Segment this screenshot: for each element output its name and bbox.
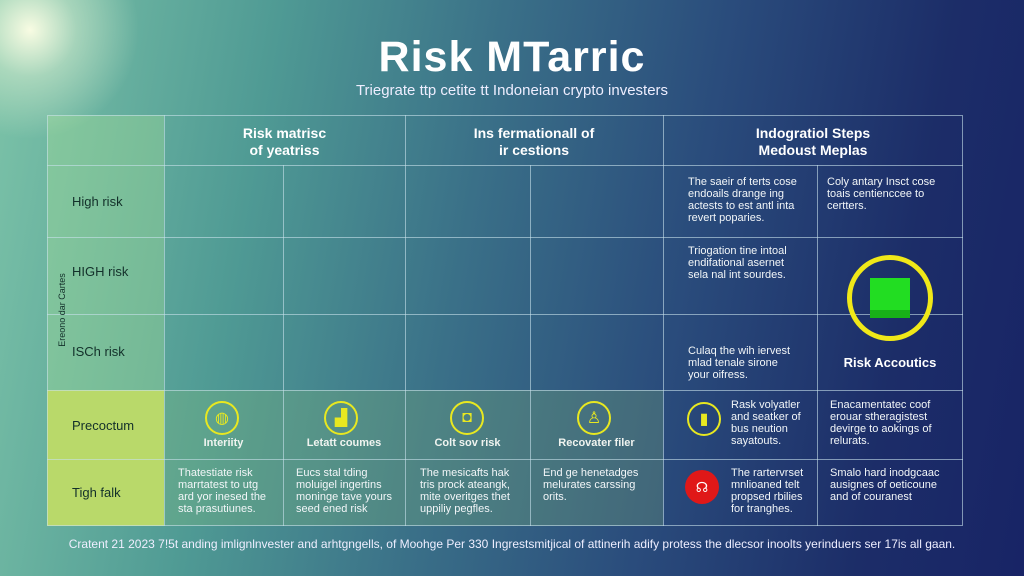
text: Interiity bbox=[204, 437, 243, 449]
row labels: High risk bbox=[72, 194, 123, 209]
icon: globe: ◍ bbox=[215, 410, 229, 427]
column headers: Risk matrisc bbox=[243, 125, 326, 141]
text: Triogation tine intoal bbox=[688, 245, 787, 257]
icon: person bbox=[577, 401, 611, 435]
text: erouar stheragistest bbox=[830, 411, 927, 423]
text: and seatker of bbox=[731, 411, 801, 423]
text: devirge to aokings of bbox=[830, 423, 932, 435]
text: certters. bbox=[827, 200, 867, 212]
icon: chart bbox=[324, 401, 358, 435]
icon: coins bbox=[687, 402, 721, 436]
icon: red alert bbox=[685, 470, 719, 504]
text: Medoust Meplas bbox=[759, 142, 867, 158]
bottom row texts bbox=[178, 467, 266, 515]
text: Indogratiol Steps bbox=[756, 125, 870, 141]
text: End ge henetadges bbox=[543, 467, 638, 479]
text: and of couranest bbox=[830, 491, 912, 503]
text: bus neution bbox=[731, 423, 788, 435]
icon: person: ♙ bbox=[587, 410, 601, 427]
text: Letatt coumes bbox=[307, 437, 381, 449]
text: for tranghes. bbox=[731, 503, 793, 515]
text: toais centienccee to bbox=[827, 188, 924, 200]
text: sayatouts. bbox=[731, 435, 781, 447]
text: The rartervrset bbox=[731, 467, 803, 479]
text: ir cestions bbox=[499, 142, 569, 158]
text: Ins fermationall of bbox=[474, 125, 594, 141]
text: Colt sov risk bbox=[434, 437, 501, 449]
text: endifational asernet bbox=[688, 257, 784, 269]
column headers: of yeatriss bbox=[249, 142, 320, 158]
text: Eucs stal tding bbox=[296, 467, 368, 479]
text: Tigh falk bbox=[72, 485, 121, 500]
right panel texts: revert poparies. bbox=[688, 212, 764, 224]
text: Coly antary Insct cose bbox=[827, 176, 935, 188]
right panel texts: actests to est antl inta bbox=[688, 200, 794, 212]
text: Risk Accoutics bbox=[844, 355, 936, 370]
bottom row texts: sta prasutiunes. bbox=[178, 503, 256, 515]
text: moninge tave yours bbox=[296, 491, 392, 503]
footer: Cratent 21 2023 7!5t anding imlignlnvester and arhtgngells, of Moohge Per 330 Ingrestsmitjical of attinerih adify protess the dlecsor inoolts yerinduers ser 17is all gaan. bbox=[69, 537, 955, 551]
bottom row texts: ard yor inesed the bbox=[178, 491, 266, 503]
text: ausignes of oeticoune bbox=[830, 479, 937, 491]
matrix table bbox=[47, 115, 963, 526]
icon: coins: ▮ bbox=[700, 411, 708, 428]
text: orits. bbox=[543, 491, 567, 503]
text: mnlioaned telt bbox=[731, 479, 800, 491]
text: Enacamentatec coof bbox=[830, 399, 930, 411]
text: seed ened risk bbox=[296, 503, 368, 515]
text: uppiliy pegfles. bbox=[420, 503, 493, 515]
column headers bbox=[243, 125, 326, 158]
right panel texts bbox=[688, 176, 797, 224]
title: Risk MTarric bbox=[379, 33, 645, 81]
text: relurats. bbox=[830, 435, 870, 447]
icon: red alert: ☊ bbox=[696, 479, 708, 495]
text: sela nal int sourdes. bbox=[688, 269, 786, 281]
text: your oifress. bbox=[688, 369, 748, 381]
text: mite overitges thet bbox=[420, 491, 510, 503]
vertical axis label: Ereono dar Cartes bbox=[57, 273, 67, 347]
icon: green cube bbox=[847, 255, 933, 341]
text: The mesicafts hak bbox=[420, 467, 509, 479]
text: moluigel ingertins bbox=[296, 479, 382, 491]
text: Smalo hard inodgcaac bbox=[830, 467, 939, 479]
text: mlad tenale sirone bbox=[688, 357, 778, 369]
text: Rask volyatler bbox=[731, 399, 800, 411]
icon: globe bbox=[205, 401, 239, 435]
text: Precoctum bbox=[72, 418, 134, 433]
text: Culaq the wih iervest bbox=[688, 345, 790, 357]
icon: chart: ▟ bbox=[335, 410, 347, 427]
text: tris prock ateangk, bbox=[420, 479, 510, 491]
icon: lock: ◘ bbox=[462, 409, 472, 426]
text: melurates carssing bbox=[543, 479, 635, 491]
bottom row texts: Thatestiate risk bbox=[178, 467, 253, 479]
right panel texts: The saeir of terts cose bbox=[688, 176, 797, 188]
text: propsed rbilies bbox=[731, 491, 803, 503]
text: ISCh risk bbox=[72, 344, 125, 359]
right panel texts: endoails drange ing bbox=[688, 188, 784, 200]
icon: lock bbox=[450, 401, 484, 435]
subtitle: Triegrate ttp cetite tt Indoneian crypto investers bbox=[356, 82, 668, 99]
text: Recovater filer bbox=[558, 437, 635, 449]
bottom row texts: marrtatest to utg bbox=[178, 479, 258, 491]
text: HIGH risk bbox=[72, 264, 128, 279]
